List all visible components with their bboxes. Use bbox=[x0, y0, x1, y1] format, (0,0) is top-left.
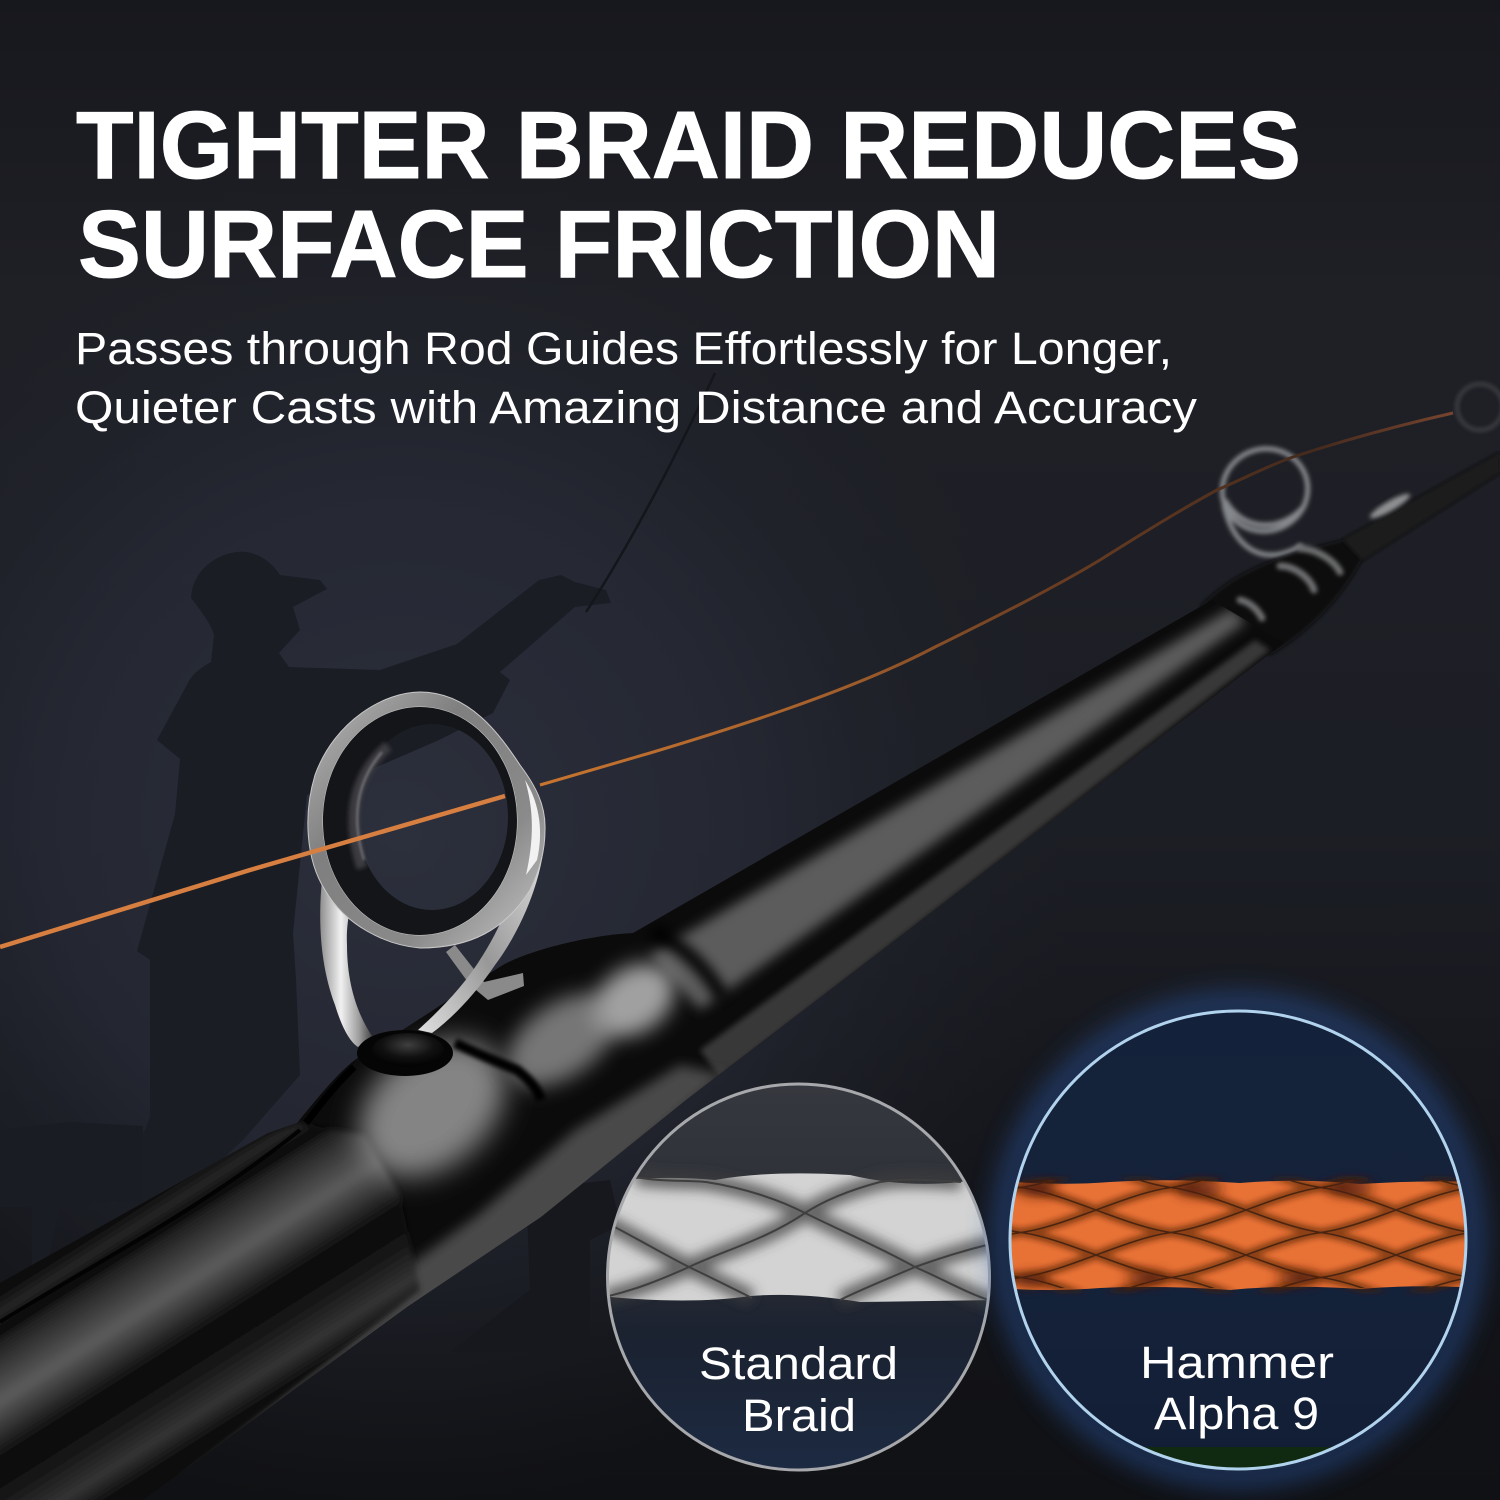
main line guide bbox=[308, 692, 545, 1047]
frame bbox=[308, 692, 545, 948]
grip with shading bbox=[0, 1123, 420, 1500]
small rod highlight bbox=[1368, 490, 1412, 522]
rear strut bbox=[446, 945, 524, 1000]
rod blank and grip bbox=[0, 600, 1284, 1500]
hammer alpha 9 label bbox=[1140, 1337, 1334, 1439]
subheading: Quieter Casts with Amazing Distance and Accuracy bbox=[75, 382, 1198, 433]
far guide rings bbox=[1211, 384, 1500, 555]
lower grip sheen bbox=[180, 1065, 725, 1500]
blue glow bbox=[1004, 1005, 1472, 1475]
decorative wrap highlight bbox=[498, 980, 623, 1099]
forward collar highlight bbox=[580, 949, 688, 1051]
right leg bbox=[418, 830, 545, 1033]
angler silhouette bbox=[0, 373, 715, 1352]
wrap edges bbox=[455, 930, 724, 1100]
left leg bbox=[320, 880, 372, 1047]
heading: SURFACE FRICTION bbox=[78, 191, 1000, 298]
white braid bbox=[600, 1173, 1000, 1302]
boat gear right bbox=[450, 1180, 620, 1352]
grip seam bbox=[0, 1130, 300, 1322]
standard braid label: Braid bbox=[742, 1390, 856, 1441]
ceramic inner highlight bbox=[354, 746, 388, 868]
right shine bbox=[525, 780, 540, 875]
panel: standard braid bbox=[600, 1084, 1000, 1470]
hammer alpha 9 label: Hammer bbox=[1140, 1337, 1334, 1388]
braided line in front of guide bbox=[0, 796, 505, 947]
hammer alpha 9 label: Alpha 9 bbox=[1154, 1388, 1319, 1439]
fishing rod in hand bbox=[586, 373, 715, 612]
orange braid bbox=[1000, 1178, 1480, 1477]
far rod section and wraps bbox=[1200, 453, 1500, 655]
collar highlight bbox=[340, 1020, 522, 1196]
panel: hammer alpha 9 bbox=[1000, 1005, 1480, 1477]
rod shaft lower streak bbox=[700, 640, 1270, 1078]
standard braid label bbox=[699, 1338, 898, 1441]
braided line behind guide bbox=[540, 413, 1453, 785]
subheading bbox=[75, 323, 1198, 433]
ceramic ring bbox=[323, 707, 517, 935]
green strip bbox=[1144, 1447, 1332, 1468]
heading: TIGHTER BRAID REDUCES bbox=[76, 92, 1301, 199]
standard braid label: Standard bbox=[699, 1338, 898, 1389]
boat seat left bbox=[0, 1122, 143, 1267]
heading bbox=[76, 92, 1301, 298]
black seam at foot bbox=[306, 1067, 354, 1123]
guide foot bbox=[357, 1030, 453, 1076]
subheading: Passes through Rod Guides Effortlessly for Longer, bbox=[75, 323, 1172, 374]
smallest guide ring bbox=[1457, 384, 1500, 430]
rod shaft upper streak bbox=[650, 608, 1246, 1010]
